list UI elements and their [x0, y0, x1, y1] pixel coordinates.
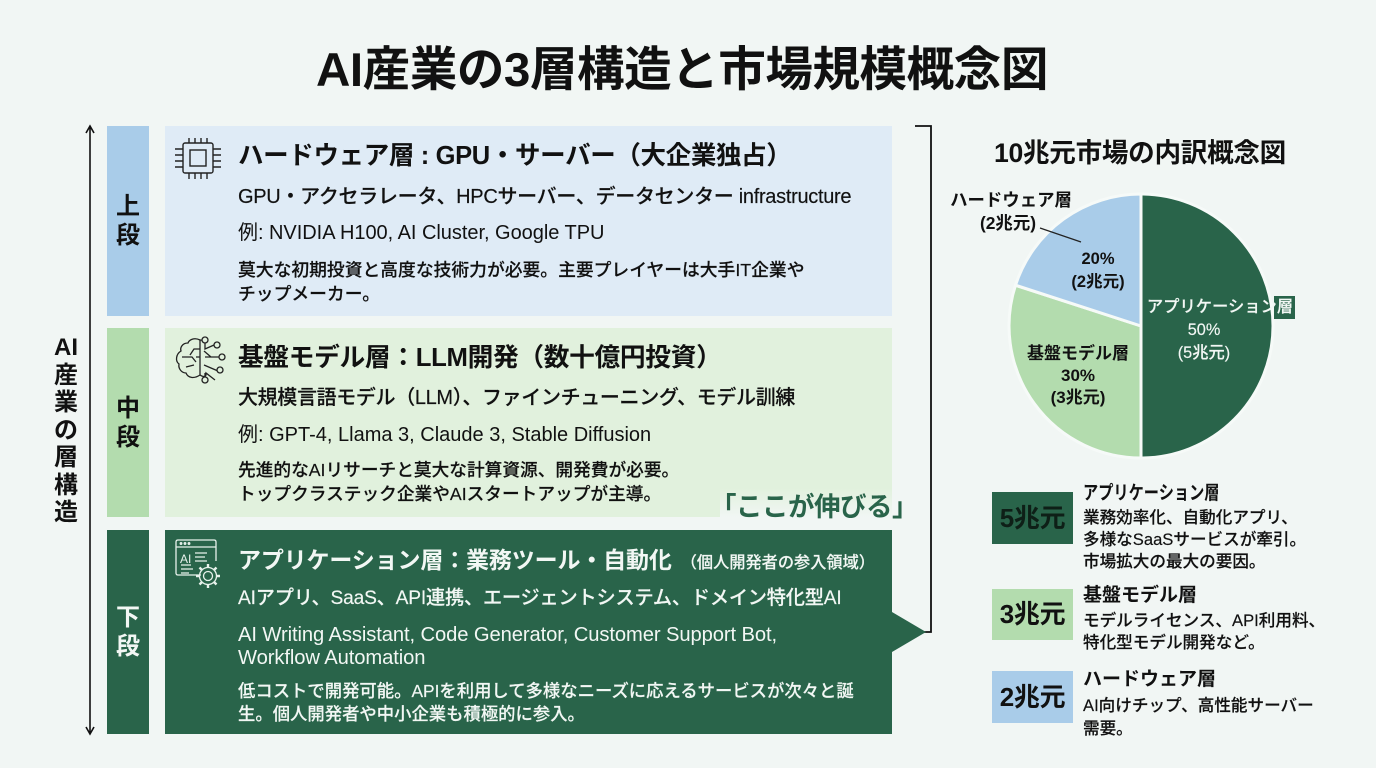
badge behind last label glyph: [1274, 296, 1295, 319]
axis label: [54, 334, 78, 526]
axis label: 業: [54, 389, 78, 416]
legend text: 需要。: [1083, 719, 1133, 738]
label: hardware outside: [950, 190, 1072, 233]
badge: [992, 671, 1073, 723]
leader line: [1040, 228, 1081, 242]
axis label: 層: [54, 444, 78, 471]
tier tab: middle: 中: [116, 394, 140, 422]
legend text: 市場拡大の最大の要因。: [1083, 552, 1266, 571]
tier tab: lower: [107, 530, 149, 734]
examples: [238, 624, 777, 669]
description: 大規模言語モデル（LLM）、ファインチューニング、モデル訓練: [238, 387, 795, 409]
tier tab: lower: 下: [116, 604, 140, 631]
axis label: 造: [54, 499, 78, 526]
tier tab: upper: 上: [116, 193, 140, 220]
description: GPU・アクセラレータ、HPCサーバー、データセンター infrastructure: [238, 186, 851, 208]
label: application: アプリケーション層: [1147, 298, 1293, 316]
label: foundation: (3兆元): [1051, 388, 1105, 407]
badge: 5兆元: [1000, 503, 1065, 533]
pie heading: 10兆元市場の内訳概念図: [994, 138, 1286, 168]
legend: 2 trillion: [992, 669, 1314, 738]
legend text: [1083, 611, 1325, 652]
tier tab: lower: 段: [116, 633, 140, 660]
heading: 基盤モデル層：LLM開発（数十億円投資）: [238, 344, 721, 372]
legend title: ハードウェア層: [1083, 669, 1216, 690]
callout background fade: [720, 488, 893, 530]
note: チップメーカー。: [238, 284, 380, 304]
legend title: 基盤モデル層: [1083, 585, 1197, 606]
badge: [992, 589, 1073, 640]
badge: [992, 492, 1073, 544]
axis label: 産: [54, 362, 78, 388]
legend: 5 trillion: [992, 482, 1306, 571]
legend text: 特化型モデル開発など。: [1083, 633, 1265, 652]
legend text: [1083, 508, 1306, 571]
icon: app window with gear: [175, 539, 220, 588]
note: 先進的なAIリサーチと莫大な計算資源、開発費が必要。: [238, 460, 679, 480]
badge: 2兆元: [1000, 682, 1065, 712]
panel: application layer: [165, 530, 892, 734]
slice: foundation 30%: [1009, 285, 1141, 458]
slice: application 50%: [1141, 194, 1273, 458]
legend title: アプリケーション層: [1083, 483, 1220, 504]
label: hardware outside: (2兆元): [980, 213, 1036, 233]
label: foundation: 30%: [1061, 366, 1095, 385]
note: [238, 681, 854, 724]
panel: hardware layer: [165, 126, 892, 316]
note: [238, 460, 679, 504]
badge: 3兆元: [1000, 599, 1065, 629]
callout: growth area: 「ここが伸びる」: [710, 492, 918, 522]
icon: chip: [175, 138, 221, 179]
legend: 3 trillion: [992, 584, 1325, 652]
tier tab: middle: [107, 328, 149, 517]
legend text: 多様なSaaSサービスが牽引。: [1083, 530, 1306, 549]
title: AI産業の3層構造と市場規模概念図: [316, 44, 1048, 97]
examples: AI Writing Assistant, Code Generator, Customer Support Bot,: [238, 624, 777, 646]
heading: アプリケーション層：業務ツール・自動化 （個人開発者の参入領域）: [238, 547, 875, 573]
legend text: AI向けチップ、高性能サーバー: [1083, 696, 1314, 715]
note: 莫大な初期投資と高度な技術力が必要。主要プレイヤーは大手IT企業や: [238, 260, 804, 280]
examples: Workflow Automation: [238, 647, 425, 669]
note: トップクラステック企業やAIスタートアップが主導。: [238, 484, 661, 504]
label: foundation: [1027, 343, 1129, 407]
label: hardware inside: (2兆元): [1071, 272, 1125, 291]
tier tab: middle: 段: [116, 424, 140, 450]
legend text: 業務効率化、自動化アプリ、: [1083, 508, 1298, 527]
icon: brain network: [176, 336, 226, 384]
label: application: [1147, 298, 1293, 362]
pie chart: [950, 190, 1295, 456]
examples: 例: GPT-4, Llama 3, Claude 3, Stable Diffusion: [238, 424, 651, 446]
axis label: 構: [54, 472, 78, 498]
examples: 例: NVIDIA H100, AI Cluster, Google TPU: [238, 222, 604, 244]
icon: app window with gear: AI: [180, 552, 191, 566]
note: 低コストで開発可能。APIを利用して多様なニーズに応えるサービスが次々と誕: [238, 681, 854, 701]
legend text: モデルライセンス、API利用料、: [1083, 611, 1325, 630]
label: hardware inside: [1071, 250, 1125, 291]
bracket linking panels to pie: [915, 125, 932, 633]
label: application: (5兆元): [1178, 344, 1230, 362]
label: hardware outside: ハードウェア層: [950, 190, 1072, 210]
tier tab: upper: 段: [116, 222, 140, 249]
label: foundation: 基盤モデル層: [1027, 343, 1129, 363]
legend text: [1083, 696, 1314, 738]
label: hardware inside: 20%: [1081, 250, 1115, 268]
axis label: AI: [54, 334, 78, 361]
slice: hardware 20%: [1016, 194, 1141, 326]
panel: foundation model layer: [165, 328, 892, 517]
pointer arrow: [892, 612, 926, 652]
heading: ハードウェア層 : GPU・サーバー（大企業独占）: [238, 142, 791, 170]
vertical axis: AI industry layers: [54, 124, 95, 736]
label: application: 50%: [1188, 321, 1220, 339]
note: [238, 260, 804, 304]
tier tab: upper: [107, 126, 149, 316]
description: AIアプリ、SaaS、API連携、エージェントシステム、ドメイン特化型AI: [238, 588, 842, 609]
double arrow: [85, 124, 95, 736]
axis label: の: [54, 416, 78, 444]
note: 生。個人開発者や中小企業も積極的に参入。: [238, 704, 585, 724]
